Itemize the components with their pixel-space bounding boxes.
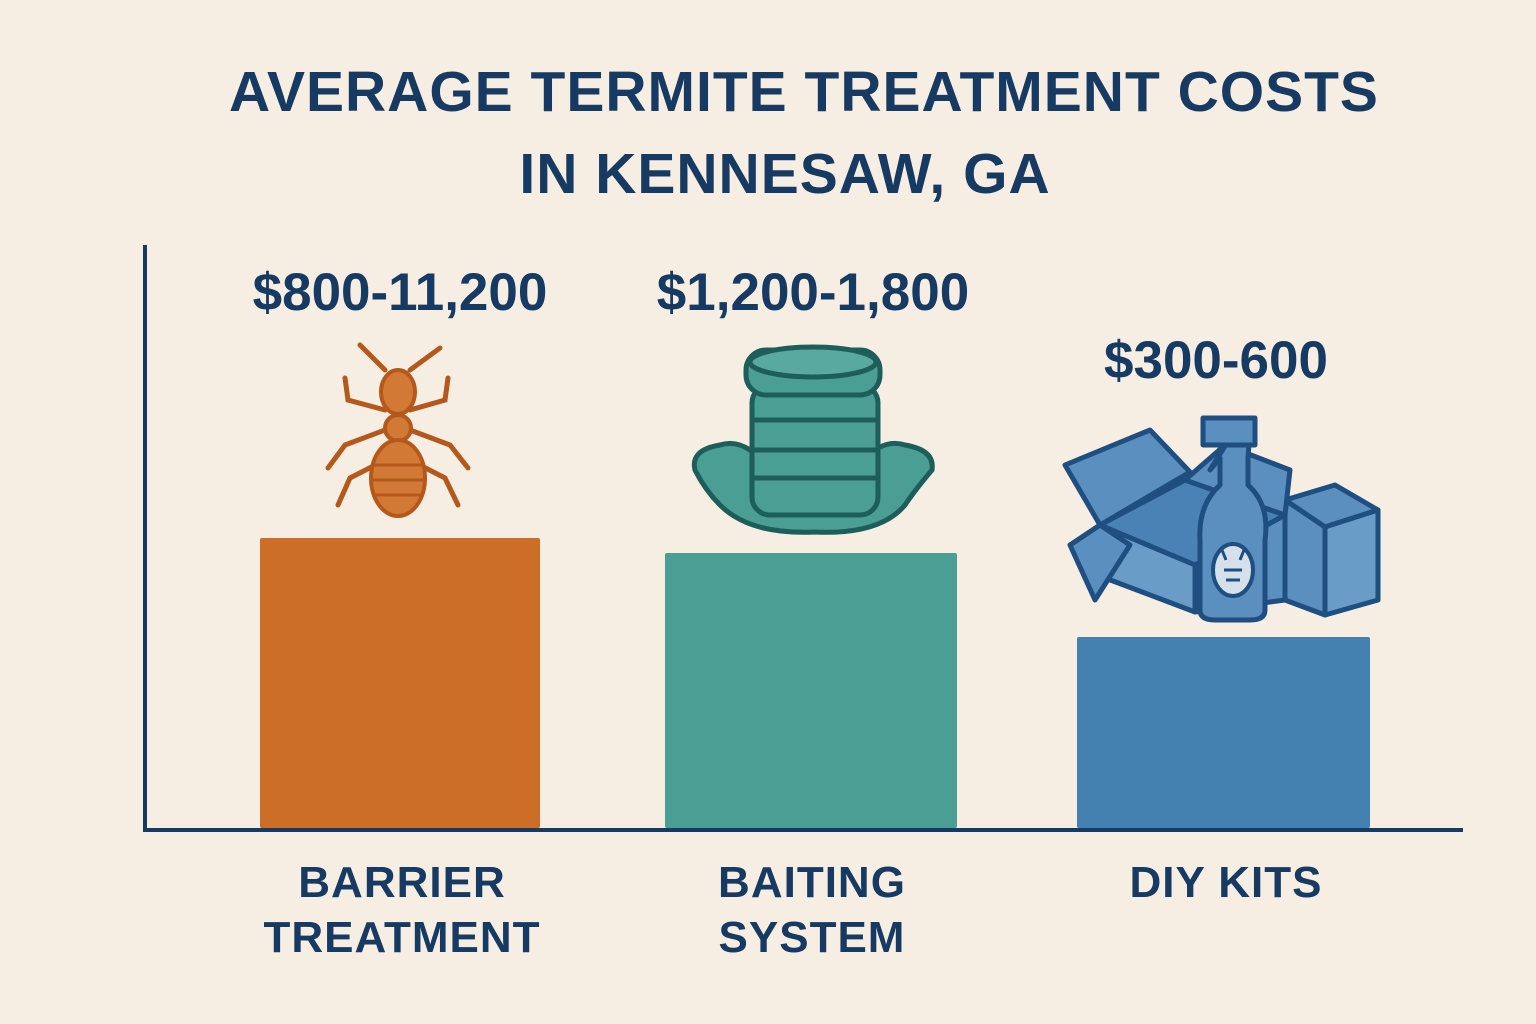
title: AVERAGE TERMITE TREATMENT COSTS — [229, 60, 1379, 124]
bar: baiting system — [665, 553, 957, 828]
icon: bait station — [692, 344, 935, 535]
label: baiting system: BAITING — [718, 858, 906, 907]
label: barrier treatment: BARRIER — [298, 858, 506, 907]
label: barrier treatment — [263, 858, 541, 962]
icon: termite — [326, 342, 470, 518]
label: barrier treatment: TREATMENT — [263, 913, 541, 962]
label: baiting system: SYSTEM — [719, 913, 905, 962]
price: DIY: $300-600 — [1104, 331, 1328, 390]
price: barrier: $800-11,200 — [253, 263, 547, 322]
title — [229, 60, 1379, 206]
bar: barrier treatment — [260, 538, 540, 828]
title: IN KENNESAW, GA — [519, 142, 1051, 206]
label: DIY kits: DIY KITS — [1129, 858, 1322, 907]
bar: DIY kits — [1077, 637, 1370, 828]
price: baiting: $1,200-1,800 — [657, 263, 969, 322]
icon: DIY kit box and spray — [1062, 416, 1380, 622]
label: baiting system — [718, 858, 906, 962]
